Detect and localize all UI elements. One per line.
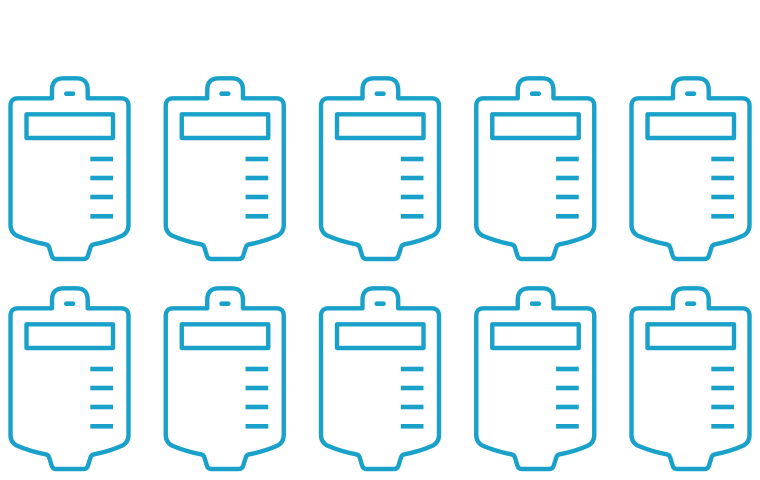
icon: IV bag row 1 column 1: [10, 78, 128, 259]
icon: IV bag row 2 column 2: [166, 288, 284, 469]
icon: IV bag row 1 column 4: [476, 78, 594, 259]
icon: IV bag row 2 column 4: [476, 288, 594, 469]
icon: IV bag row 1 column 2: [166, 78, 284, 259]
icon: IV bag row 2 column 5: [632, 288, 750, 469]
icon: IV bag row 2 column 3: [321, 288, 439, 469]
icon: IV bag row 2 column 1: [10, 288, 128, 469]
icon: IV bag row 1 column 3: [321, 78, 439, 259]
icon: IV bag row 1 column 5: [632, 78, 750, 259]
